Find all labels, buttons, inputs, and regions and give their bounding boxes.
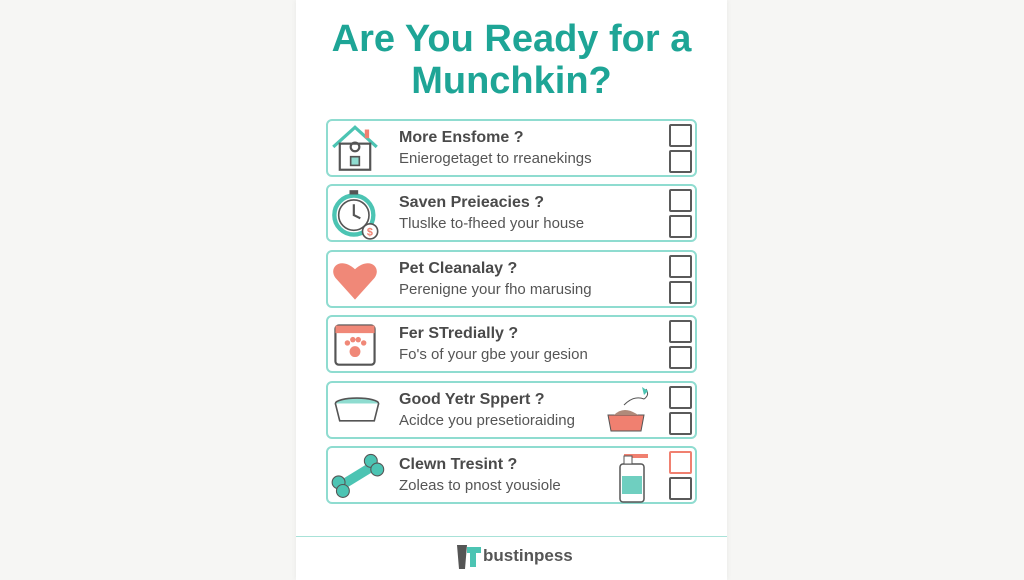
icon: calendar paw: [334, 324, 376, 366]
row 1: Enierogetaget to rreanekings: [399, 150, 592, 167]
icon: stopwatch: [332, 190, 378, 240]
logo: [457, 545, 573, 569]
title: [332, 18, 692, 102]
row 1: [326, 119, 697, 177]
row 1: More Ensfome ?: [399, 129, 523, 146]
icon: bowl: [334, 397, 380, 422]
row 4: Fo's of your gbe your gesion: [399, 346, 588, 363]
row 5: Good Yetr Sppert ?: [399, 391, 544, 408]
row 6: Zoleas to pnost yousiole: [399, 477, 561, 494]
title: Are You Ready for a: [332, 18, 691, 60]
row 2: Tluslke to-fheed your house: [399, 215, 584, 232]
row 3: Perenigne your fho marusing: [399, 281, 592, 298]
row 3: Pet Cleanalay ?: [399, 260, 517, 277]
icon: bottle: [619, 454, 648, 503]
row 6: Clewn Tresint ?: [399, 456, 517, 473]
card: [296, 0, 727, 580]
row 6: [326, 446, 697, 504]
row 3: [326, 250, 697, 308]
row 5: [326, 381, 697, 439]
icon: food bowl: [607, 387, 648, 432]
icon: stopwatch: $: [367, 227, 373, 239]
row 2: Saven Preieacies ?: [399, 194, 544, 211]
row 2: [326, 184, 697, 242]
icon: house: [332, 125, 378, 171]
title: Munchkin?: [411, 60, 612, 102]
row 4: Fer STredially ?: [399, 325, 518, 342]
logo: bustinpess: [483, 546, 573, 565]
icon: bone: [332, 454, 384, 498]
row 5: Acidce you presetioraiding: [399, 412, 575, 429]
row 4: [326, 315, 697, 373]
icon: heart: [333, 263, 377, 300]
footer divider: [296, 536, 727, 537]
